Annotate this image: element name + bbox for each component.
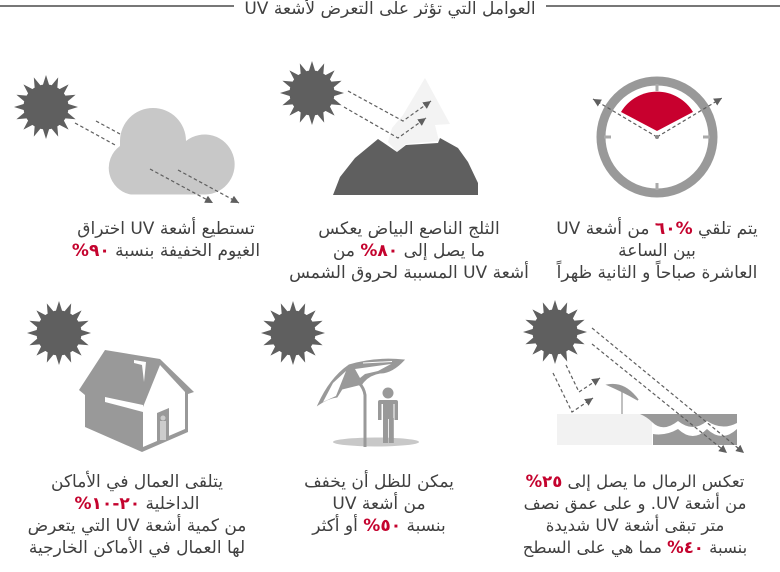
icon: sun	[27, 301, 91, 365]
icon: clock face	[601, 81, 713, 193]
text: clock: العاشرة صباحاً و الثانية ظهراً	[557, 263, 757, 283]
icon: snow cap	[388, 78, 450, 152]
text: indoors: لها العمال في الأماكن الخارجية	[29, 538, 245, 558]
panel: shade	[261, 301, 454, 536]
text: sand and water: من أشعة UV. و على عمق نصف	[524, 494, 746, 513]
text: sand and water: بنسبة ٤٠% مما هي على السطح	[523, 538, 747, 557]
icon: sun	[280, 61, 344, 125]
text: shade	[304, 470, 454, 536]
text: cloud: الغيوم الخفيفة بنسبة ٩٠%	[72, 241, 260, 261]
panel: clock	[556, 76, 758, 283]
text: clock: يتم تلقي %٦٠ من أشعة UV	[556, 219, 758, 239]
text: indoors	[28, 470, 246, 558]
icon: red sector	[621, 92, 693, 131]
arrows: rays through cloud	[75, 121, 239, 203]
text: snow: أشعة UV المسببة لحروق الشمس	[289, 263, 529, 283]
icon: cloud	[109, 108, 235, 194]
icon: person	[378, 388, 398, 443]
text: sand and water: تعكس الرمال ما يصل إلى ٢٥%	[526, 472, 744, 491]
icon: house	[79, 350, 194, 452]
icon: beach umbrella	[608, 385, 638, 414]
text: cloud	[72, 217, 260, 261]
text: indoors: الداخلية ٢٠-١٠%	[74, 494, 199, 514]
panel: sand and water	[523, 300, 747, 557]
text: shade: يمكن للظل أن يخفف	[304, 472, 454, 492]
text: clock: بين الساعة	[618, 241, 696, 261]
text: sand and water: متر تبقى أشعة UV شديدة	[546, 516, 724, 535]
text: indoors: يتلقى العمال في الأماكن	[51, 472, 223, 492]
text: snow	[289, 219, 529, 283]
icon: umbrella	[318, 359, 404, 447]
text: shade: بنسبة ٥٠% أو أكثر	[312, 516, 446, 536]
icon: sand	[557, 414, 652, 445]
text: snow: الثلج الناصع البياض يعكس	[318, 219, 500, 239]
text: snow: ما يصل إلى ٨٠% من	[333, 241, 485, 261]
arrows: rays	[553, 328, 744, 453]
panel: snow	[280, 61, 529, 283]
text: shade: من أشعة UV	[332, 494, 426, 514]
text: sand and water	[523, 472, 747, 557]
arrows: reflected rays	[344, 91, 431, 138]
icon: mountain	[333, 138, 478, 195]
icon: shadow	[333, 438, 419, 446]
text: indoors: من كمية أشعة UV التي يتعرض	[28, 516, 246, 536]
text: cloud: تستطيع أشعة UV اختراق	[77, 219, 255, 239]
text: clock	[556, 217, 758, 283]
icon: sun	[261, 301, 325, 365]
panel: indoors	[27, 301, 246, 558]
icon: sun	[14, 75, 78, 139]
icon: water	[640, 414, 737, 445]
panel: cloud	[14, 75, 260, 261]
icon: sun	[523, 300, 587, 364]
arrows: clock hands	[593, 98, 722, 139]
